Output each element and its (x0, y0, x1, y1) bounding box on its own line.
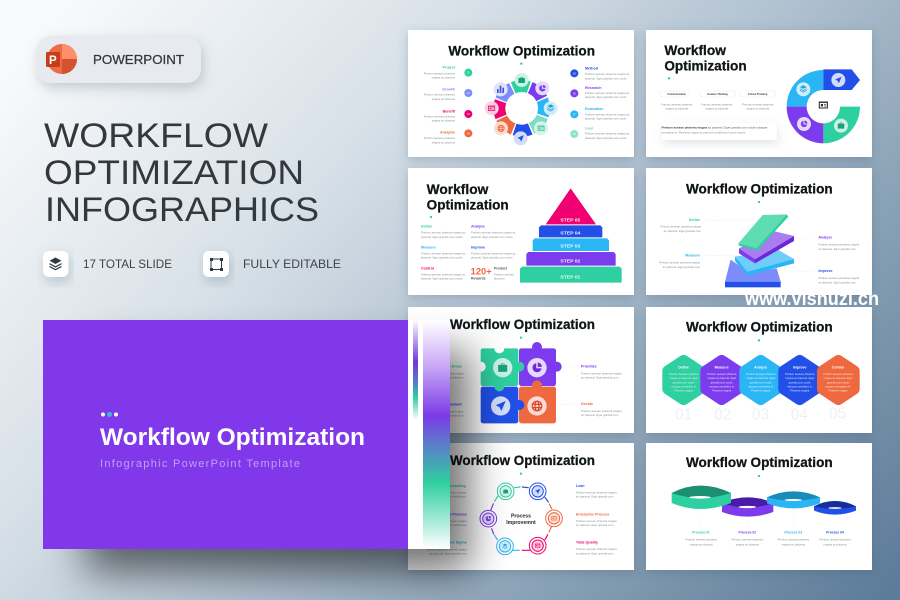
slide 3: pyramid: Pretium aenean pharetra magna ac (471, 231, 516, 235)
slide 2: G shaped chart: penatibus et. Pharetra magna ac placerat vestibulum lectus mauris (662, 131, 746, 135)
slide 3: pyramid: Define (421, 225, 432, 229)
feature: 17 total slide: 17 TOTAL SLIDE (83, 257, 172, 271)
slide 1: ring of eight segments: 08 (573, 134, 576, 136)
slide 3: pyramid: Optimization (427, 198, 509, 213)
slide 6: hexagon process: magna ac placerat. Eget (669, 376, 698, 380)
slide 3: pyramid: Measure (421, 245, 436, 249)
slide 7: process improvement cycle: Enterprise Process (576, 512, 609, 516)
slide 7: process improvement cycle: Pretium aenean pharetra magna (576, 491, 617, 495)
slide 6: hexagon process: Measure (715, 365, 729, 369)
slide 1: ring of eight segments: Pretium aenean pharetra magna ac (585, 132, 630, 136)
slide 1: ring of eight segments: magna ac placerat (432, 97, 455, 101)
slide 3: pyramid: pharetra (494, 277, 505, 281)
slide 1: ring of eight segments: Pretium aenean pharetra (424, 136, 455, 140)
slide 6: hexagon process: 02 (714, 406, 731, 423)
slide 3: pyramid: Control (421, 266, 434, 270)
slide 6: hexagon process: Pharetra magna (751, 389, 771, 393)
slide 7: process improvement cycle: ac placerat. Eget gravida cum (576, 551, 614, 555)
slide 3: pyramid: placerat. Eget gravida cum sociis (421, 235, 463, 239)
slide 1: ring of eight segments: 05 (573, 73, 576, 75)
slide 4: stacked 3D plates: Pretium aenean pharetra magna (818, 243, 859, 247)
slide 3: pyramid: placerat. Eget gravida cum sociis (471, 256, 513, 260)
slide 4: stacked 3D plates: Pretium aenean pharetra magna (660, 225, 701, 229)
slide 7: process improvement cycle: Lean Six Sigma (440, 541, 468, 545)
main title (44, 117, 319, 229)
slide 6: hexagon process (646, 307, 872, 433)
slide 6: hexagon process: natoque penatibus et (748, 384, 773, 388)
slide 6: hexagon process: Improve (793, 365, 807, 369)
slide 1: ring of eight segments: 02 (467, 93, 470, 95)
slide 7: process improvement cycle: ac placerat. Eget gravida cum (576, 523, 614, 527)
slide 5: puzzle: placerat vestibulum (439, 376, 464, 380)
slide 3: pyramid: placerat. Eget gravida cum sociis (421, 256, 463, 260)
gradient strip beside cover panel (408, 320, 450, 549)
slide 3: pyramid: Rewards (471, 276, 486, 280)
slide 6: hexagon process: Workflow Optimization (686, 320, 833, 335)
slide 8: 3D ring steps: magna ac placerat (823, 542, 847, 546)
slide 6: hexagon process: 05 (829, 405, 846, 422)
slide 3: pyramid: STEP 01 (560, 275, 580, 281)
slide 2: G shaped chart: Communication (667, 93, 687, 96)
slide 5: puzzle: ac placerat. Eget gravida cum (581, 376, 619, 380)
slide 1: ring of eight segments: 06 (573, 93, 576, 95)
slide 1: ring of eight segments: Analysis (440, 131, 455, 135)
slide 7: process improvement cycle: Process (511, 513, 531, 519)
slide 6: hexagon process: gravida cum sociis (827, 380, 850, 384)
badge: PowerPoint: POWERPOINT (93, 53, 184, 67)
slide 3: pyramid: Improve (471, 245, 485, 249)
slide 3: pyramid: Analyze (471, 225, 485, 229)
slide 3: pyramid: Pretium aenean (494, 272, 514, 276)
slide 5: puzzle: Pretium aenean magna (434, 372, 464, 376)
slide 8: 3D ring steps: Process 03 (785, 531, 802, 535)
slide 5: puzzle: Focus Areas (440, 365, 462, 369)
slide 3: pyramid: STEP 04 (560, 231, 580, 237)
slide 8: 3D ring steps: magna ac placerat (736, 542, 759, 546)
slide 1: ring of eight segments: Pretium aenean pharetra magna ac (585, 112, 630, 116)
slide 4: stacked 3D plates: ac placerat. Eget gravida cum (663, 265, 701, 269)
slide 6: hexagon process: Pharetra magna (712, 389, 732, 393)
slide 6: hexagon process: Pretium aenean pharetra (746, 372, 776, 376)
slide 6: hexagon process: 04 (791, 406, 808, 423)
slide 2: G shaped chart: magna ac placerat (746, 107, 770, 111)
icon: vector square (210, 258, 223, 271)
slide 1: ring of eight segments: 01 (467, 73, 470, 75)
slide 6: hexagon process: natoque penatibus et (826, 384, 851, 388)
slide 7: process improvement cycle: Total Quality (576, 541, 599, 545)
slide 7: process improvement cycle: Pretium aenean pharetra magna (576, 547, 617, 551)
slide 1: ring of eight segments: Method (585, 66, 598, 70)
slide 6: hexagon process: Define (678, 365, 689, 369)
slide 5: puzzle: Prioritize (581, 365, 597, 369)
slide 3: pyramid: 120+ (471, 266, 492, 276)
slide 8: 3D ring steps (646, 443, 872, 570)
slide 5: puzzle (408, 307, 634, 433)
slide 2: G shaped chart (646, 30, 872, 157)
slide 2: G shaped chart: Pretium aenean pharetra (661, 102, 693, 106)
slide 4: stacked 3D plates: ac placerat. Eget gravida cum (818, 247, 856, 251)
slide 1: ring of eight segments: placerat. Eget gravida cum sociis (585, 136, 627, 140)
slide 1: ring of eight segments: 03 (467, 114, 470, 116)
cover slide: purple panel: Infographic PowerPoint Template (100, 458, 300, 470)
slide 6: hexagon process: Pretium aenean pharetra (823, 372, 853, 376)
slide 6: hexagon process: Pretium aenean pharetra (669, 372, 699, 376)
slide 5: puzzle: placerat vestibulum (439, 413, 464, 417)
slide 2: G shaped chart: Critical Thinking (748, 93, 768, 96)
cover slide: purple panel: Workflow Optimization (100, 424, 365, 451)
slide 1: ring of eight segments: Benefit (443, 109, 456, 113)
slide 1: ring of eight segments: placerat. Eget gravida cum sociis (585, 117, 627, 121)
slide 8: 3D ring steps: Process 02 (739, 531, 756, 535)
slide 4: stacked 3D plates: Improve (818, 269, 833, 273)
slide 4: stacked 3D plates: Define (689, 218, 700, 222)
slide 7: process improvement cycle: Pretium aenean magna (437, 491, 466, 495)
icon: PowerPoint logo (46, 44, 77, 74)
slide 2: G shaped chart: Pretium aenean pharetra magna ac placerat. Eget gravida cum sociis natoque (662, 125, 768, 129)
slide 4: stacked 3D plates: ac placerat. Eget gravida cum (664, 229, 702, 233)
icon: PowerPoint logo: P (49, 55, 57, 67)
slide 7: process improvement cycle: Business Process (435, 512, 467, 516)
slide 1: ring of eight segments: Project (443, 66, 456, 70)
slide 6: hexagon process: gravida cum sociis (750, 380, 772, 384)
slide 1: ring of eight segments: Pretium aenean pharetra (424, 71, 455, 75)
slide 4: stacked 3D plates: Workflow Optimization (686, 181, 833, 196)
slide 8: 3D ring steps: Pretium aenean pharetra (778, 537, 809, 541)
slide 3: pyramid: STEP 02 (560, 258, 580, 264)
slide 3: pyramid: Workflow (427, 182, 489, 197)
slide 8: 3D ring steps: Process 04 (826, 531, 844, 535)
watermark: www.vishuzi.cn (744, 289, 879, 310)
slide 7: process improvement cycle: Workflow Optimization (450, 453, 595, 468)
feature: fully editable: FULLY EDITABLE (243, 257, 341, 271)
slide 1: ring of eight segments: Pretium aenean pharetra (424, 114, 455, 118)
slide 5: puzzle: ac placerat. Eget gravida cum (581, 413, 619, 417)
slide 8: 3D ring steps: magna ac placerat (782, 542, 805, 546)
slide 7: process improvement cycle: Pretium aenean pharetra magna (576, 519, 617, 523)
slide 6: hexagon process: 01 (675, 406, 692, 423)
slide 8: 3D ring steps: Process 01 (692, 531, 710, 535)
slide 7: process improvement cycle: ac placerat. Eget gravida cum (429, 552, 467, 556)
slide 7: process improvement cycle: Pretium aenean pharetra magna (426, 547, 467, 551)
slide 1: ring of eight segments: magna ac placerat (432, 118, 455, 122)
slide 4: stacked 3D plates: Pretium aenean pharetra magna (659, 261, 700, 265)
slide 1: ring of eight segments: Research (585, 86, 601, 90)
slide 5: puzzle: Improvement (439, 402, 462, 406)
icon: layers (50, 258, 61, 270)
slide 5: puzzle: Pretium aenean magna (434, 409, 464, 413)
slide 1: ring of eight segments: Evaluation (585, 107, 603, 111)
slide 6: hexagon process: magna ac placerat. Eget (824, 376, 853, 380)
slide 7: process improvement cycle: Improvemnt (506, 520, 536, 526)
slide 6: hexagon process: Pharetra magna (674, 389, 694, 393)
slide 6: hexagon process: Pharetra magna (790, 389, 810, 393)
slide 6: hexagon process: natoque penatibus et (709, 384, 734, 388)
slide 6: hexagon process: Analyze (754, 365, 767, 369)
slide 1: ring of eight segments: magna ac placerat (432, 140, 455, 144)
slide 6: hexagon process: magna ac placerat. Eget (785, 376, 814, 380)
slide 3: pyramid: placerat. Eget gravida cum sociis (421, 277, 463, 281)
slide 6: hexagon process: Pretium aenean pharetra (707, 372, 737, 376)
slide 3: pyramid: Pretium aenean pharetra magna ac (421, 251, 466, 255)
main title: OPTIMIZATION (44, 154, 304, 192)
slide 1: ring of eight segments: Pretium aenean pharetra (424, 93, 455, 97)
slide 3: pyramid: STEP 05 (560, 218, 580, 224)
slide 7: process improvement cycle (408, 443, 634, 570)
slide 7: process improvement cycle: ac placerat. Eget gravida cum (576, 495, 614, 499)
main title: INFOGRAPHICS (45, 191, 319, 229)
slide 6: hexagon process: natoque penatibus et (787, 384, 812, 388)
slide 2: G shaped chart: magna ac placerat (705, 107, 729, 111)
slide 6: hexagon process: Control (832, 365, 844, 369)
slide 1: ring of eight segments: 04 (467, 133, 470, 135)
slide 6: hexagon process: gravida cum sociis (673, 380, 695, 384)
slide 3: pyramid: Product (494, 267, 508, 271)
slide 1: ring of eight segments: Workflow Optimization (448, 44, 595, 59)
slide 8: 3D ring steps: Pretium aenean pharetra (732, 537, 763, 541)
feature: 17 total slide (43, 251, 172, 277)
badge: PowerPoint (37, 36, 201, 83)
cover slide: purple panel (43, 320, 408, 549)
slide 6: hexagon process: Pharetra magna (828, 389, 848, 393)
slide 5: puzzle: Workflow Optimization (450, 317, 595, 332)
slide 6: hexagon process: gravida cum sociis (711, 380, 733, 384)
slide 5: puzzle: Pretium aenean pharetra magna (581, 409, 622, 413)
slide 1: ring of eight segments: Pretium aenean pharetra magna ac (585, 72, 630, 76)
slide 2: G shaped chart: Pretium aenean pharetra (701, 102, 733, 106)
slide 1: ring of eight segments (408, 30, 634, 157)
slide 7: process improvement cycle: placerat vestibulum (442, 523, 467, 527)
slide 1: ring of eight segments: placerat. Eget gravida cum sociis (585, 95, 627, 99)
slide 3: pyramid: Pretium aenean pharetra magna ac (421, 231, 466, 235)
slide 2: G shaped chart: Creative Thinking (707, 93, 728, 96)
slide 7: process improvement cycle: Lean Learning (441, 484, 466, 488)
slide 5: puzzle: Pretium aenean pharetra magna (581, 372, 622, 376)
slide 8: 3D ring steps: magna ac placerat (689, 542, 713, 546)
slide 6: hexagon process: gravida cum sociis (789, 380, 811, 384)
slide 5: puzzle: Decide (581, 402, 593, 406)
slide 1: ring of eight segments: Growth (442, 87, 455, 91)
slide 4: stacked 3D plates: Analyze (818, 236, 832, 240)
slide 7: process improvement cycle: Lean (576, 484, 585, 488)
slide 1: ring of eight segments: 07 (573, 114, 576, 116)
cover panel shadow (85, 350, 470, 572)
slide 2: G shaped chart: Optimization (664, 59, 747, 74)
slide 7: process improvement cycle: Pretium aenean magna (437, 519, 467, 523)
slide 6: hexagon process: magna ac placerat. Eget (746, 376, 775, 380)
main title: WORKFLOW (44, 117, 268, 155)
slide 8: 3D ring steps: Pretium aenean pharetra (819, 537, 851, 541)
slide 3: pyramid (408, 168, 634, 295)
cover dots (101, 412, 118, 417)
slide 3: pyramid: placerat. Eget gravida cum sociis (471, 235, 513, 239)
slide 2: G shaped chart: Pretium aenean pharetra (742, 102, 774, 106)
feature: fully editable (203, 251, 341, 277)
slide 4: stacked 3D plates (646, 168, 872, 295)
slide 8: 3D ring steps: Workflow Optimization (686, 455, 833, 470)
slide 4: stacked 3D plates: Measure (685, 254, 700, 258)
slide 4: stacked 3D plates: Pretium aenean pharetra magna (818, 276, 859, 280)
slide 1: ring of eight segments: placerat. Eget gravida cum sociis (585, 76, 627, 80)
slide 3: pyramid: Pretium aenean pharetra magna ac (421, 272, 466, 276)
slide 4: stacked 3D plates: ac placerat. Eget gravida cum (818, 280, 856, 284)
slide 1: ring of eight segments: Pretium aenean pharetra magna ac (585, 91, 630, 95)
slide 7: process improvement cycle: placerat vestibulum (442, 495, 467, 499)
slide 3: pyramid: Pretium aenean pharetra magna ac (471, 251, 516, 255)
slide 6: hexagon process: magna ac placerat. Eget (707, 376, 736, 380)
slide 1: ring of eight segments: magna ac placerat (432, 75, 455, 79)
slide 8: 3D ring steps: Pretium aenean pharetra (685, 537, 717, 541)
slide 6: hexagon process: 03 (752, 406, 769, 423)
slide 3: pyramid: STEP 03 (560, 244, 580, 250)
slide 2: G shaped chart: magna ac placerat (665, 107, 689, 111)
slide 1: ring of eight segments: Goal (585, 127, 593, 131)
slide 6: hexagon process: Pretium aenean pharetra (785, 372, 815, 376)
slide 2: G shaped chart: Workflow (664, 43, 726, 58)
slide 6: hexagon process: natoque penatibus et (671, 384, 696, 388)
